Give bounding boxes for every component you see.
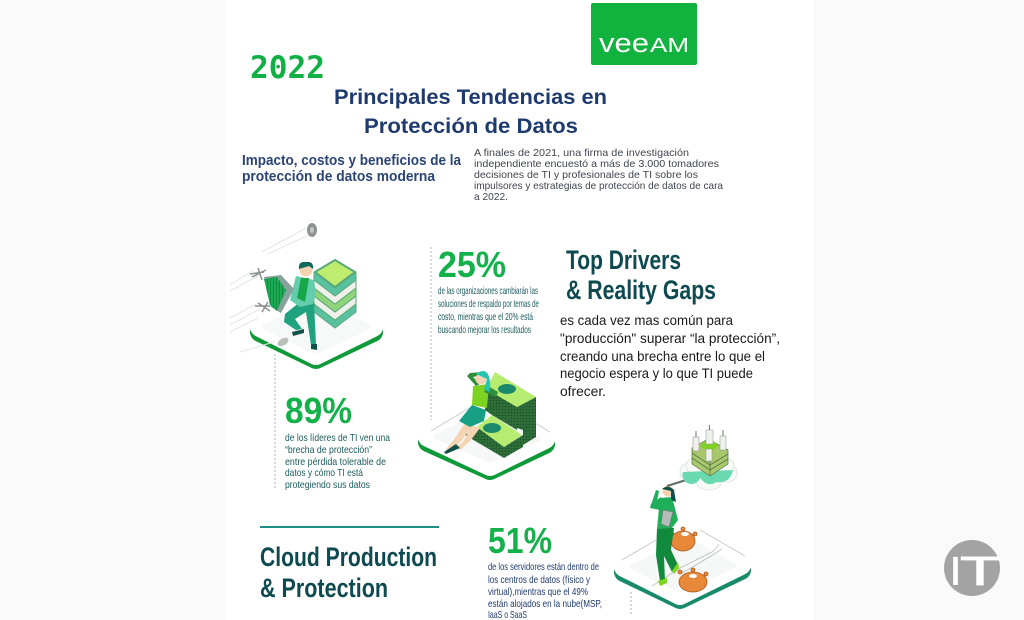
cloud (680, 454, 737, 490)
title: Protección de Datos (364, 115, 578, 138)
woman head and hair (476, 374, 486, 384)
paragraph: reality gap: "producción" superar “la protección”, (560, 331, 780, 346)
connector line (630, 592, 632, 616)
shield (264, 275, 294, 313)
stat: 89%: datos y cómo TI está (285, 467, 363, 479)
server stack (314, 260, 356, 328)
stat: 89%: “brecha de protección” (285, 444, 372, 456)
woman legs (446, 421, 473, 452)
clipboard (661, 510, 673, 527)
orange mines (670, 527, 708, 592)
intro paragraph (474, 147, 723, 203)
paragraph: reality gap: es cada vez mas común para (560, 313, 733, 328)
intro paragraph: independiente encuestó a más de 3.000 tomadores (474, 158, 719, 170)
woman arm (467, 372, 482, 386)
stat: 51%: 51% (488, 520, 552, 561)
divider (260, 526, 439, 528)
stat: 89%: 89% (285, 390, 352, 431)
woman legs (656, 528, 678, 581)
ground cracks (652, 544, 722, 586)
heading: Cloud Production: Cloud Production (260, 542, 437, 572)
paragraph: reality gap: creando una brecha entre lo que el (560, 349, 765, 364)
illustration: woman resting on money (428, 371, 550, 470)
castle (692, 439, 728, 476)
paragraph: reality gap: negocio espera y lo que TI puede (560, 366, 753, 381)
upper money stack (517, 397, 536, 445)
intro paragraph: a 2022. (474, 191, 508, 203)
stat: 51%: están alojados en la nube(MSP, (488, 598, 602, 610)
paragraph: reality gap: ofrecer. (560, 384, 606, 399)
man torso (290, 276, 316, 307)
logo: Veeam: vee (599, 28, 649, 58)
motion trails (230, 228, 311, 352)
stat: 25%: de las organizaciones cambiarán las (438, 285, 538, 297)
woman head (662, 486, 674, 496)
stat: 25%: 25% (438, 244, 506, 285)
intro paragraph: impulsores y estrategias de protección de datos de cara (474, 180, 723, 192)
intro paragraph: decisiones de TI y profesionales de TI sobre los (474, 169, 698, 181)
lower money stack (465, 427, 523, 458)
intro paragraph: A finales de 2021, una firma de investigación (474, 147, 689, 159)
stat: 51%: de los servidores están dentro de (488, 561, 599, 573)
platform (624, 538, 741, 599)
illustration: woman dreaming of cloud castle (622, 425, 745, 599)
stat: 51%: los centros de datos (físico y (488, 574, 591, 586)
stat: 89%: de los líderes de TI ven una (285, 432, 390, 444)
stat: 89% (285, 390, 390, 491)
stat: 51% (488, 520, 602, 620)
title (334, 86, 607, 138)
subtitle: Impacto, costos y beneficios de la (242, 152, 462, 169)
paragraph: reality gap (560, 313, 780, 399)
stat: 51%: virtual),mientras que el 49% (488, 586, 588, 598)
logo: Veeam (591, 3, 697, 65)
platform (428, 409, 545, 470)
year heading: 2022 (250, 50, 325, 86)
connector line (430, 247, 432, 420)
flying objects (307, 223, 317, 237)
subtitle (242, 152, 462, 185)
logo: IT watermark (944, 540, 1000, 596)
woman torso (472, 384, 489, 408)
woman skirt (459, 405, 486, 427)
logo: Veeam: AM (650, 35, 689, 57)
heading: Cloud Production: & Protection (260, 573, 388, 603)
woman arm raised (651, 490, 659, 506)
heading: Cloud Production (260, 542, 437, 603)
heading: Top Drivers: Top Drivers (566, 245, 681, 275)
stat: 25%: buscando mejorar los resultados (438, 324, 531, 336)
logo: IT watermark: T (960, 548, 1000, 594)
thought trail (667, 470, 698, 486)
heading: Top Drivers: & Reality Gaps (566, 275, 716, 305)
logo: IT watermark: I (951, 548, 960, 594)
man head (300, 264, 312, 276)
subtitle: protección de datos moderna (242, 168, 436, 185)
stat: 89%: protegiendo sus datos (285, 479, 370, 491)
man legs (284, 302, 316, 345)
stat: 25% (438, 244, 539, 336)
illustration: man with shield and servers (230, 223, 373, 359)
woman jacket (657, 497, 678, 529)
connector line (274, 354, 276, 490)
stat: 89%: entre pérdida tolerable de (285, 456, 386, 468)
heading: Top Drivers (566, 245, 716, 305)
stat: 25%: costo, mientras que el 20% está (438, 311, 533, 323)
platform (260, 300, 373, 359)
stat: 25%: soluciones de respaldo por temas de (438, 298, 539, 310)
title: Principales Tendencias en (334, 86, 607, 109)
